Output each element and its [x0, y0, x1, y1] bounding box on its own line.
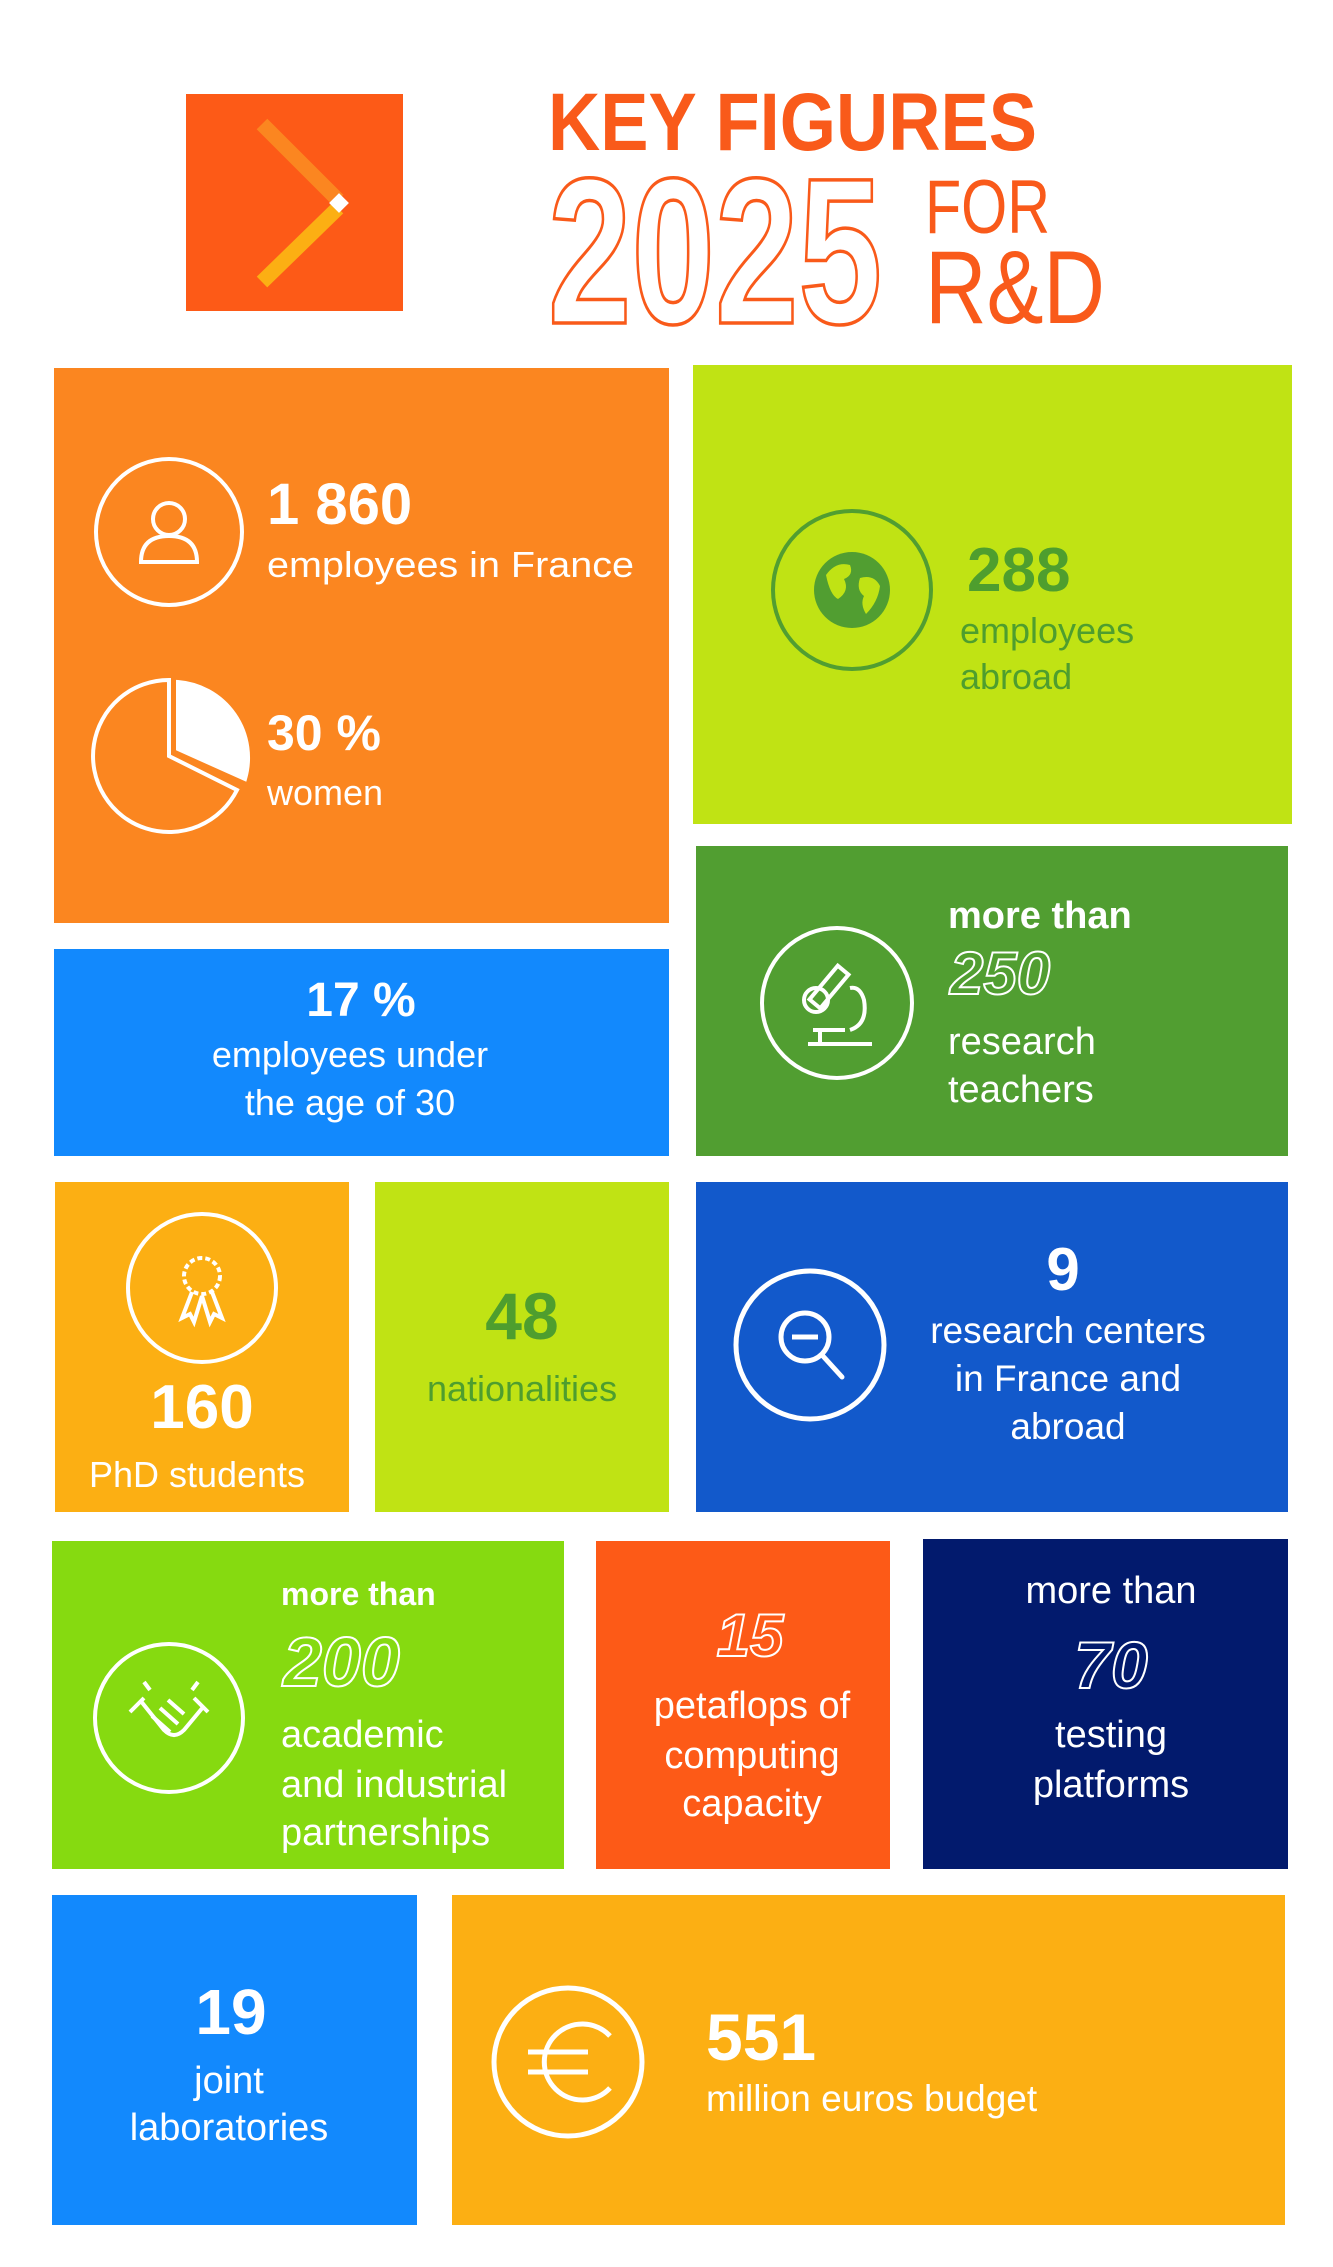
panel: under 30 — [54, 949, 669, 1156]
panel: under 30: the age of 30 — [245, 1082, 455, 1123]
panel: partnerships: academic — [281, 1714, 444, 1756]
icon: microscope — [762, 928, 912, 1078]
panel: research teachers: 250 — [949, 940, 1050, 1007]
panel: budget: 551 — [706, 2000, 816, 2074]
panel: testing platforms: platforms — [1033, 1764, 1189, 1806]
title: 2025 — [548, 136, 882, 368]
panel: research centers: in France and — [955, 1358, 1181, 1399]
panel: employees abroad: abroad — [960, 656, 1072, 697]
panel: nationalities — [375, 1182, 669, 1512]
panel: nationalities: 48 — [485, 1279, 559, 1353]
panel: joint laboratories: laboratories — [130, 2107, 328, 2149]
panel: petaflops: capacity — [682, 1783, 822, 1825]
panel: budget: million euros budget — [706, 2078, 1038, 2119]
title: KEY FIGURES — [548, 77, 1037, 168]
panel: partnerships — [52, 1541, 564, 1869]
logo — [186, 94, 403, 311]
panel: testing platforms — [923, 1539, 1288, 1869]
panel: nationalities: nationalities — [427, 1368, 617, 1409]
panel: petaflops — [596, 1541, 890, 1869]
icon: person — [96, 459, 242, 605]
panel: partnerships: partnerships — [281, 1812, 490, 1854]
panel: employees abroad — [693, 365, 1292, 824]
panel: research teachers — [696, 846, 1288, 1156]
icon: globe — [773, 511, 931, 669]
panel: PhD students — [55, 1182, 349, 1512]
panel: employees France and women: 1 860 — [267, 472, 412, 537]
panel: research teachers: teachers — [948, 1069, 1094, 1111]
panel: testing platforms: testing — [1055, 1714, 1167, 1756]
panel: petaflops: computing — [664, 1735, 840, 1777]
panel: PhD students: 160 — [150, 1373, 254, 1442]
panel: employees France and women: 30 % — [267, 705, 381, 761]
panel: joint laboratories — [52, 1895, 417, 2225]
panel: research centers — [696, 1182, 1288, 1512]
panel: partnerships: more than — [281, 1576, 436, 1612]
panel: employees France and women: women — [266, 772, 383, 813]
title: FOR — [925, 165, 1050, 250]
icon: magnifier — [736, 1271, 884, 1419]
title: R&D — [925, 230, 1105, 346]
panel: research centers: 9 — [1046, 1236, 1080, 1303]
panel: research centers: abroad — [1010, 1406, 1126, 1447]
icon: award ribbon — [128, 1214, 276, 1362]
panel: budget — [452, 1895, 1285, 2225]
panel: PhD students: PhD students — [89, 1454, 305, 1495]
icon: euro — [494, 1988, 642, 2136]
panel: joint laboratories: 19 — [195, 1976, 267, 2048]
panel: testing platforms: 70 — [1074, 1628, 1148, 1702]
panel: petaflops: 15 — [717, 1602, 785, 1669]
panel: employees France and women — [54, 368, 669, 923]
panel: under 30: 17 % — [306, 974, 416, 1027]
title — [548, 77, 1105, 368]
icon: handshake — [95, 1644, 243, 1792]
panel: under 30: employees under — [212, 1034, 488, 1075]
panel: partnerships: 200 — [281, 1623, 400, 1701]
panel: partnerships: and industrial — [281, 1764, 507, 1806]
panel: employees abroad: employees — [960, 610, 1134, 651]
panel: joint laboratories: joint — [193, 2060, 264, 2102]
panel: testing platforms: more than — [1025, 1570, 1197, 1612]
panel: employees abroad: 288 — [967, 536, 1070, 605]
icon: pie chart — [93, 680, 248, 832]
panel: research centers: research centers — [930, 1310, 1206, 1351]
panel: employees France and women: employees in France — [267, 544, 634, 585]
panel: petaflops: petaflops of — [654, 1685, 851, 1727]
panel: research teachers: more than — [948, 895, 1132, 937]
panel: research teachers: research — [948, 1021, 1096, 1063]
